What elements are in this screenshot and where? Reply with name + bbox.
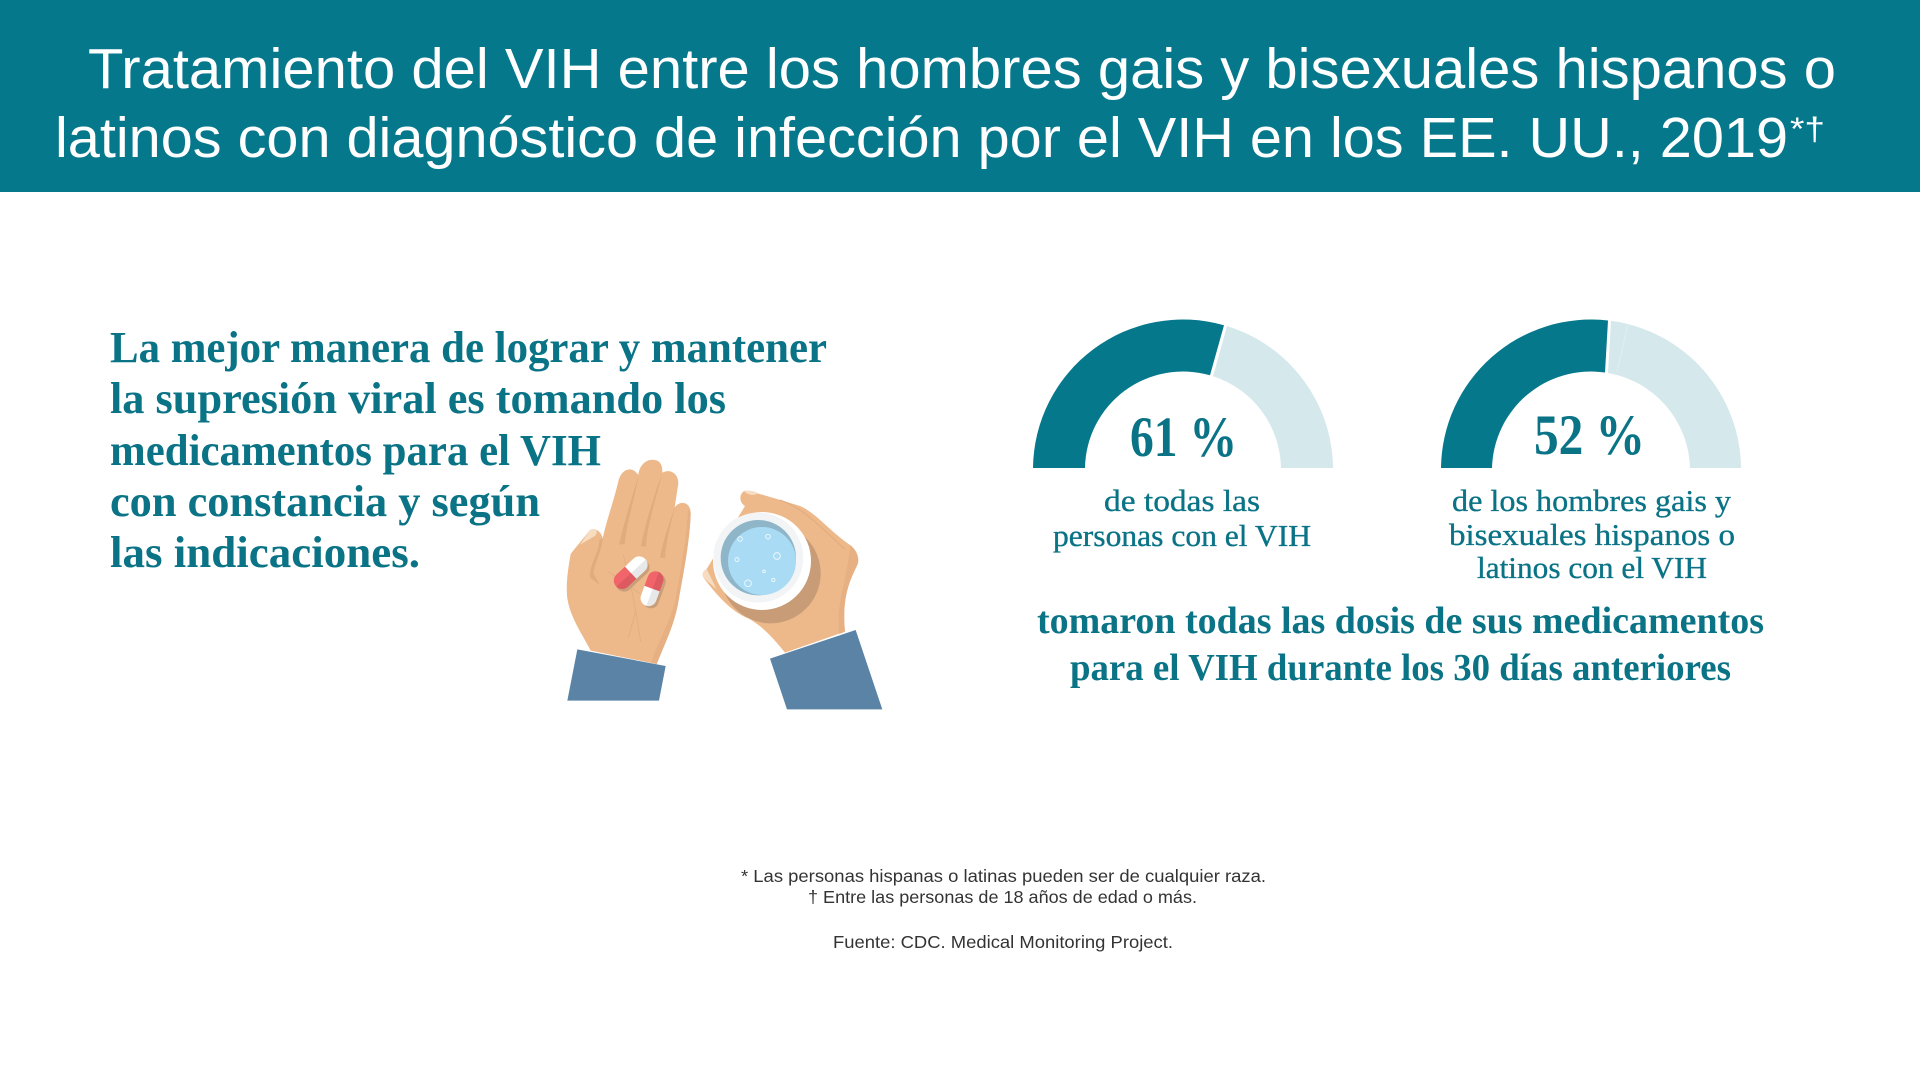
percentage 61: 61 % bbox=[1130, 406, 1237, 469]
title bbox=[55, 37, 1836, 170]
title: Tratamiento del VIH entre los hombres gais y bisexuales hispanos o bbox=[88, 37, 1836, 101]
icon: right hand holding cup bbox=[703, 491, 858, 653]
gauge: Hispanic/Latino gay and bisexual men 52% bbox=[1441, 320, 1741, 585]
header banner bbox=[0, 0, 1920, 192]
gauge caption: latinos con el VIH bbox=[1477, 550, 1707, 585]
key message text: la supresión viral es tomando los bbox=[110, 374, 726, 423]
footnotes and source: * Las personas hispanas o latinas pueden ser de cualquier raza. bbox=[741, 866, 1266, 886]
gauge caption: de todas las bbox=[1104, 483, 1260, 518]
key message text bbox=[110, 323, 827, 577]
key message text: las indicaciones. bbox=[110, 528, 420, 577]
footnotes and source bbox=[741, 866, 1266, 952]
footnotes and source: Fuente: CDC. Medical Monitoring Project. bbox=[833, 932, 1173, 952]
summary statement: tomaron todas las dosis de sus medicamentos bbox=[1037, 600, 1764, 642]
key message text: La mejor manera de lograr y mantener bbox=[110, 323, 827, 372]
title: *† bbox=[1790, 111, 1825, 147]
percentage 52: 52 % bbox=[1534, 404, 1645, 467]
title: latinos con diagnóstico de infección por el VIH en los EE. UU., 2019 bbox=[55, 106, 1788, 170]
gauge caption: bisexuales hispanos o bbox=[1449, 517, 1735, 552]
gauge caption bbox=[1053, 483, 1311, 553]
gauge caption: de los hombres gais y bbox=[1452, 483, 1732, 518]
icon: capsules bbox=[610, 553, 668, 611]
key message text: con constancia y según bbox=[110, 477, 540, 526]
icon: left sleeve bbox=[567, 649, 666, 701]
illustration: hands with pills and water bbox=[567, 460, 882, 709]
summary statement bbox=[1037, 600, 1764, 689]
icon: water cup bbox=[713, 512, 811, 610]
gauge: all people 61% bbox=[1033, 319, 1333, 553]
icon: left hand bbox=[567, 460, 691, 664]
key message text: medicamentos para el VIH bbox=[110, 426, 601, 475]
icon: right sleeve bbox=[770, 630, 882, 709]
summary statement: para el VIH durante los 30 días anteriores bbox=[1070, 647, 1731, 689]
gauge caption: personas con el VIH bbox=[1053, 518, 1311, 553]
gauge caption bbox=[1449, 483, 1735, 585]
footnotes and source: † Entre las personas de 18 años de edad o más. bbox=[808, 887, 1197, 907]
